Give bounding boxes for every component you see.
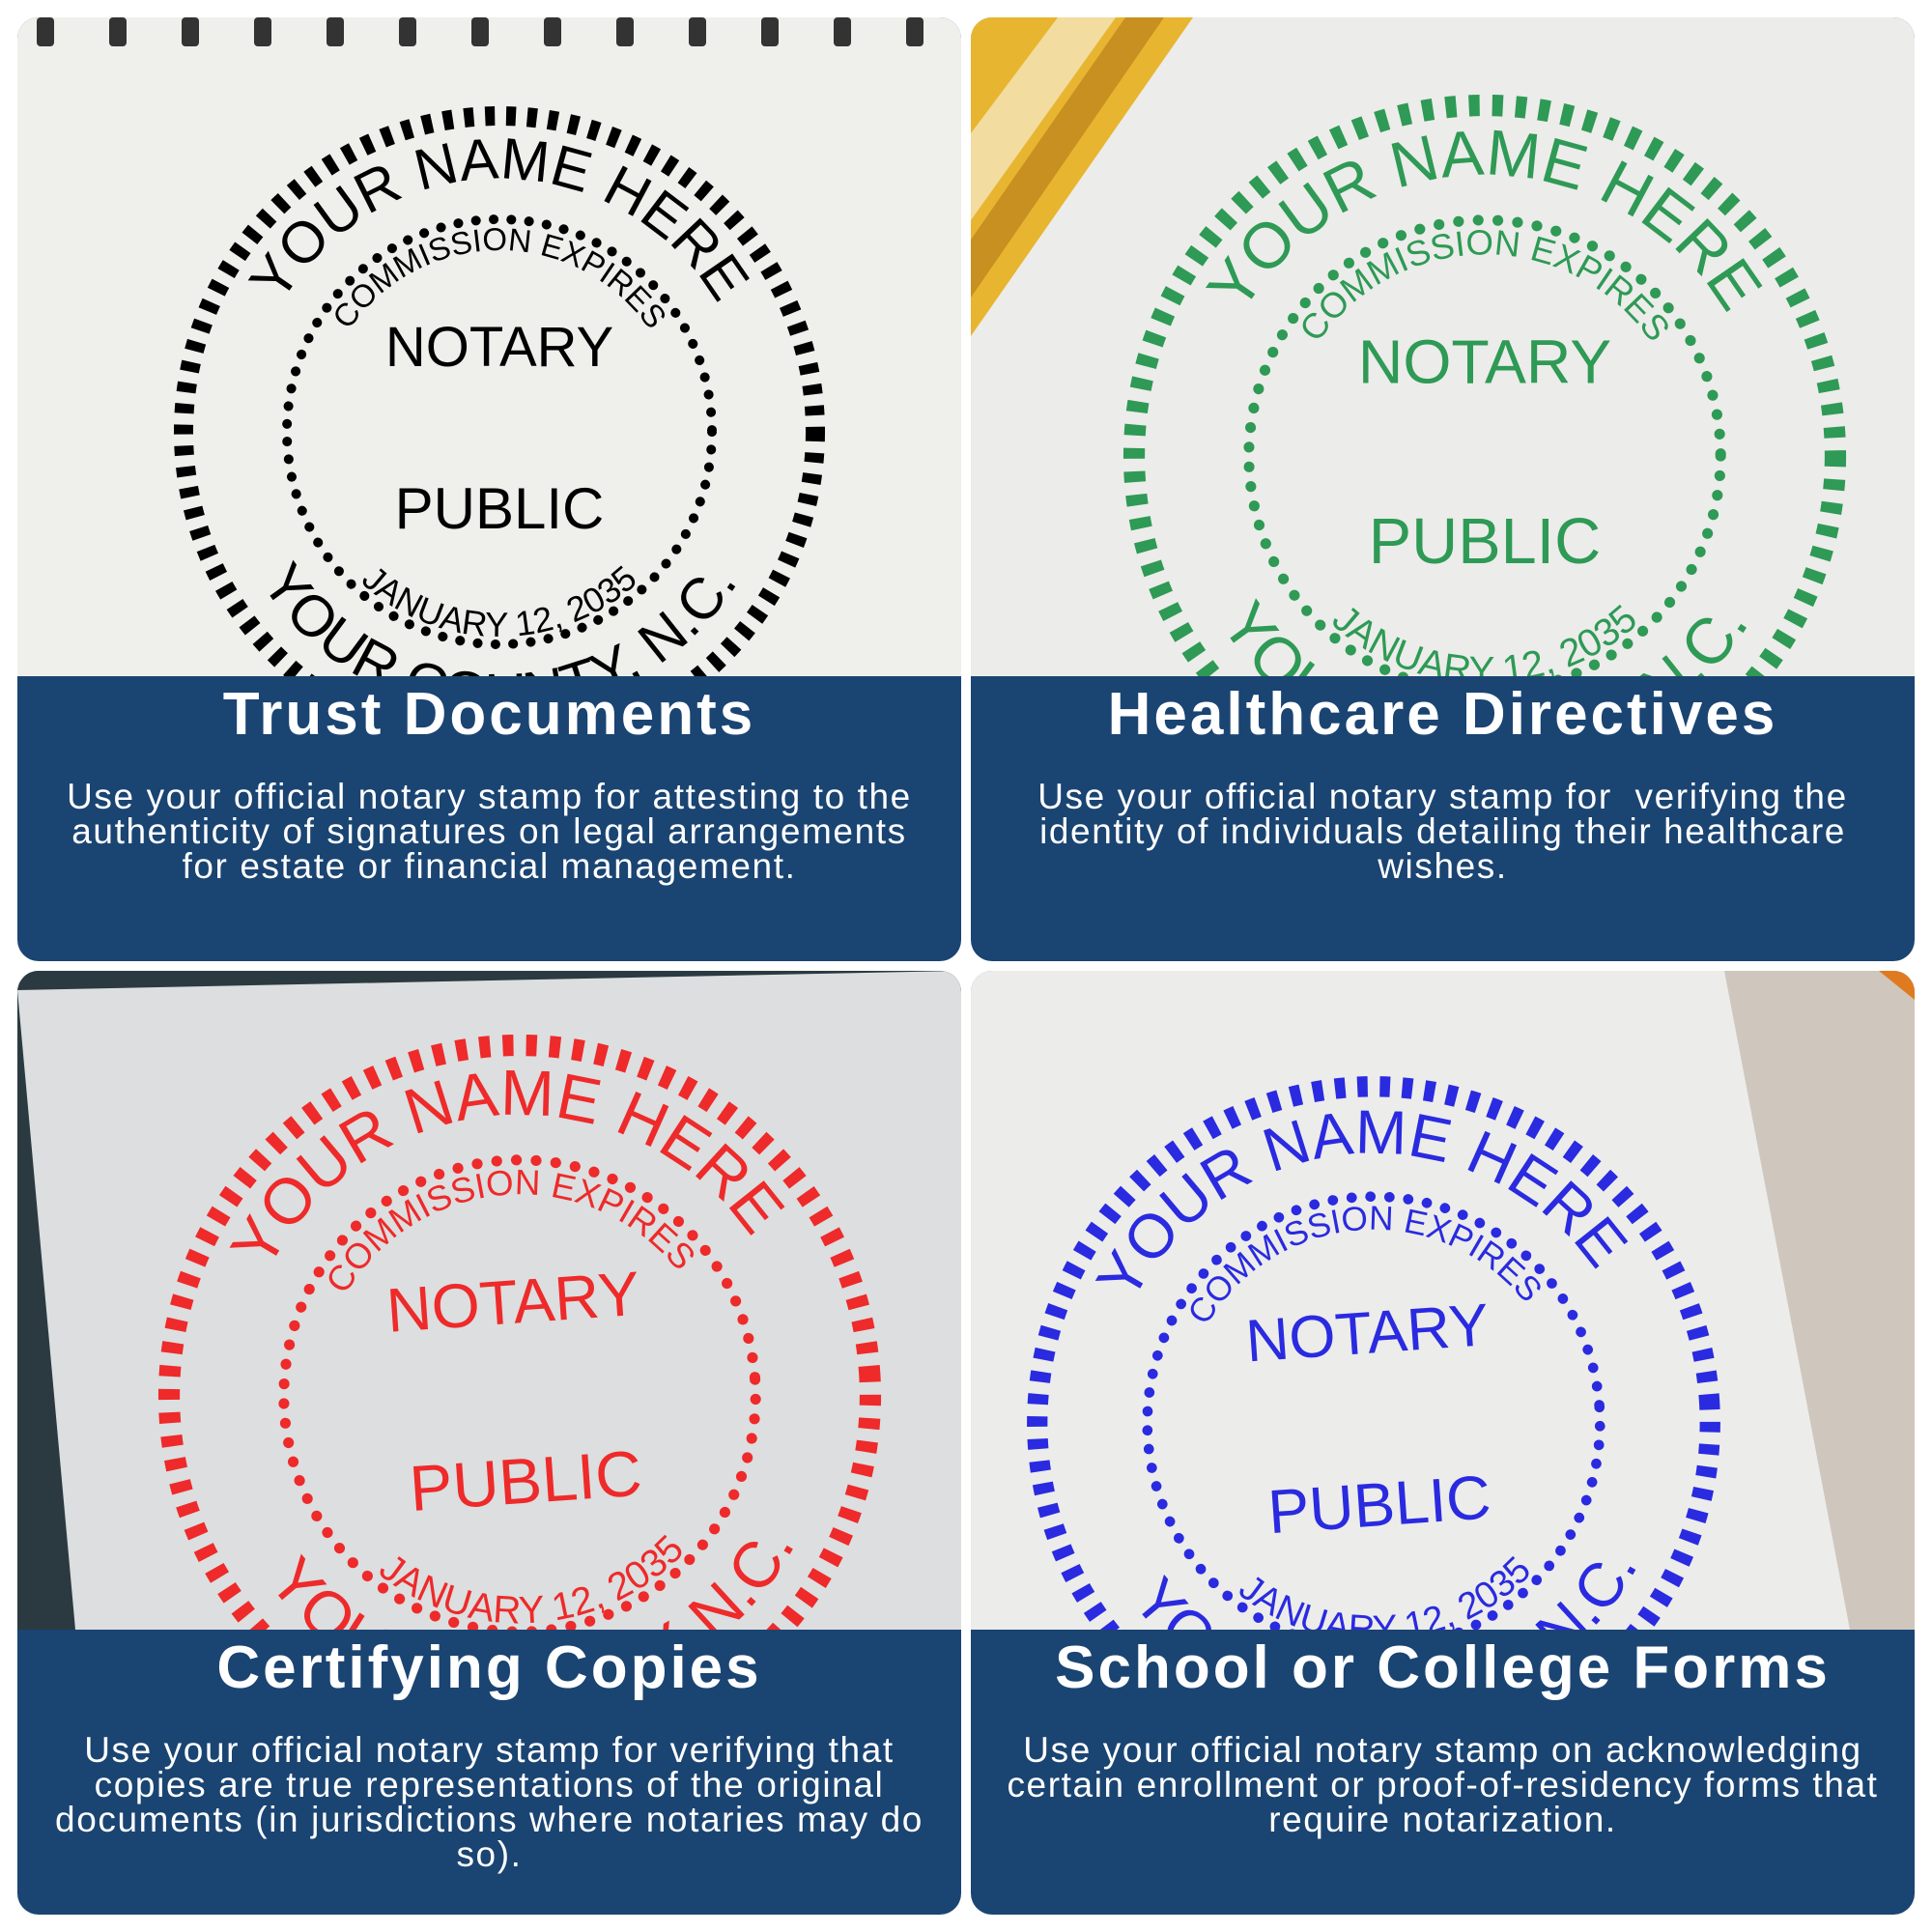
caption band: school or college forms: School or College Forms — [1055, 1634, 1831, 1701]
caption band: certifying copies: copies are true representations of the original — [95, 1765, 884, 1804]
photo: black stamp on notebook: YOUR NAME HERE — [247, 138, 750, 302]
panel: certifying copies — [17, 971, 961, 1915]
photo: red stamp on textured paper: YOUR NAME HERE — [230, 1070, 784, 1256]
photo: blue stamp on paper over wood: YOUR NAME HERE — [1095, 1111, 1629, 1289]
photo: green stamp with chalk — [971, 17, 1915, 676]
caption band: certifying copies: so). — [456, 1834, 523, 1874]
photo: green stamp with chalk: COMMISSION EXPIRES — [1302, 230, 1668, 340]
caption band: trust documents: authenticity of signatures on legal arrangements — [71, 811, 907, 851]
photo: blue stamp on paper over wood: NOTARY — [1244, 1292, 1491, 1376]
caption band: school or college forms — [1007, 1634, 1879, 1839]
caption band: healthcare directives: identity of individuals detailing their healthcare — [1039, 811, 1846, 851]
caption band: trust documents: Use your official notary stamp for attesting to the — [67, 777, 912, 816]
caption band: trust documents — [67, 681, 912, 886]
photo: red stamp on textured paper — [17, 971, 961, 1630]
photo: red stamp on textured paper: JANUARY 12, 2035 — [381, 1534, 682, 1624]
photo: blue stamp on paper over wood: PUBLIC — [1265, 1462, 1493, 1547]
caption band: healthcare directives — [1037, 681, 1848, 886]
caption band: certifying copies — [55, 1634, 923, 1874]
photo: red stamp on textured paper: COMMISSION EXPIRES — [328, 1169, 694, 1291]
photo: red stamp on textured paper: NOTARY — [384, 1259, 642, 1346]
panel: school or college forms — [971, 971, 1915, 1915]
caption band: trust documents: Trust Documents — [223, 681, 755, 748]
caption band: school or college forms: certain enrollment or proof-of-residency forms that — [1007, 1765, 1879, 1804]
photo: black stamp on notebook: COMMISSION EXPIRES — [335, 228, 665, 327]
caption band: school or college forms: Use your official notary stamp on acknowledging — [1023, 1730, 1862, 1770]
caption band: healthcare directives: Healthcare Directives — [1108, 681, 1777, 748]
caption band: healthcare directives: Use your official notary stamp for verifying the — [1037, 777, 1848, 816]
photo: green stamp with chalk: NOTARY — [1358, 327, 1611, 397]
panel: trust documents — [17, 17, 961, 961]
photo: black stamp on notebook — [17, 17, 961, 676]
photo: green stamp with chalk: PUBLIC — [1369, 506, 1601, 578]
caption band: certifying copies: documents (in jurisdictions where notaries may do — [55, 1800, 923, 1839]
photo: blue stamp on paper over wood — [971, 971, 1915, 1630]
photo: black stamp on notebook: PUBLIC — [395, 476, 604, 541]
photo: black stamp on notebook: NOTARY — [385, 316, 613, 379]
caption band: certifying copies: Use your official notary stamp for verifying that — [84, 1730, 895, 1770]
photo: blue stamp on paper over wood: COMMISSION EXPIRES — [1190, 1206, 1541, 1321]
caption band: certifying copies: Certifying Copies — [216, 1634, 762, 1701]
photo: black stamp on notebook: JANUARY 12, 2035 — [363, 566, 636, 637]
photo: green stamp with chalk: YOUR NAME HERE — [1206, 129, 1762, 312]
caption band: healthcare directives: wishes. — [1378, 846, 1508, 886]
caption band: school or college forms: require notarization. — [1268, 1800, 1617, 1839]
caption band: trust documents: for estate or financial management. — [182, 846, 796, 886]
photo: red stamp on textured paper: PUBLIC — [408, 1437, 644, 1525]
panel: healthcare directives — [971, 17, 1915, 961]
